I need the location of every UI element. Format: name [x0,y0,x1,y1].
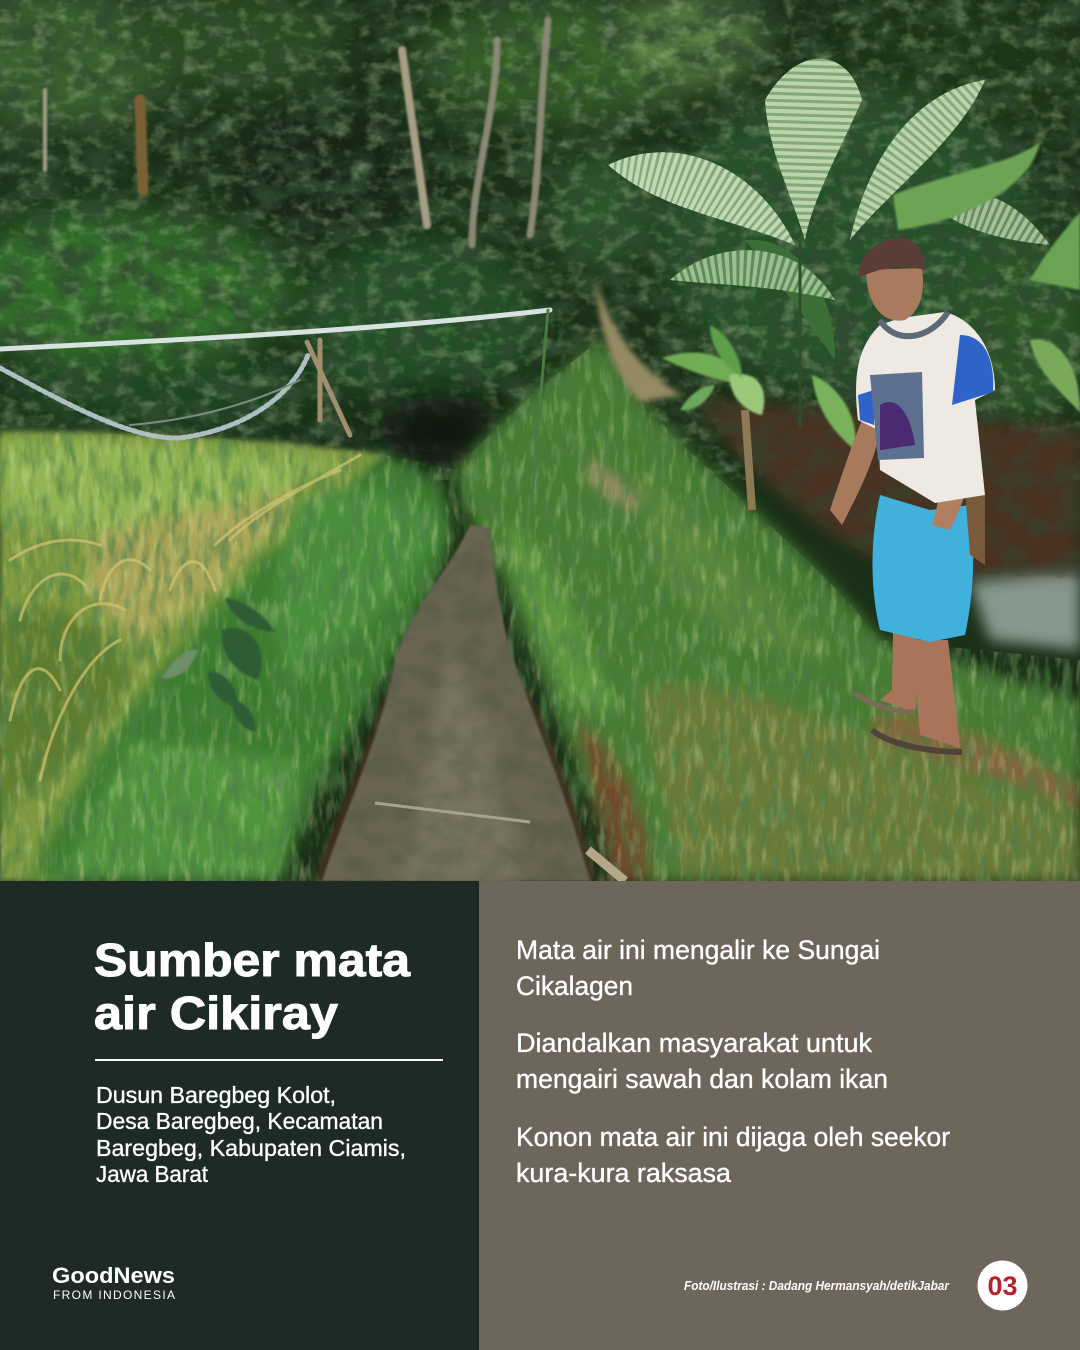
right grass bank and path [456,340,1080,881]
logo: GoodNews from Indonesia [52,1263,175,1302]
canal water [320,520,625,881]
title: air Cikiray [94,987,338,1039]
title [94,934,411,1039]
fact 3: Konon mata air ini dijaga oleh seekor [516,1122,950,1152]
shirt [856,312,995,503]
fact 2: mengairi sawah dan kolam ikan [516,1064,888,1094]
page number badge [978,1260,1028,1310]
legs [880,630,960,748]
location text: Desa Baregbeg, Kecamatan [96,1108,383,1134]
head [866,268,923,321]
fact 3: kura-kura raksasa [516,1158,732,1188]
palm and banana plants [590,40,1080,510]
fact 3 [516,1122,950,1188]
logo: GoodNews from Indonesia: FROM INDONESIA [53,1288,175,1302]
belt sash [965,490,985,565]
left grass bank [30,455,450,881]
man standing in cap, white shirt and blue shorts [830,238,995,752]
grass blade texture [0,335,1080,881]
foliage texture [0,0,1080,480]
fact 1: Mata air ini mengalir ke Sungai [516,935,880,965]
left rice field [0,432,385,881]
taro plant on the bank [162,598,275,732]
title: Sumber mata [94,934,410,986]
tree trunks [45,20,548,245]
arms [830,420,880,525]
logo: GoodNews from Indonesia: GoodNews [52,1263,175,1288]
dark hollow over the canal [378,394,502,466]
location text: Dusun Baregbeg Kolot, [96,1082,336,1108]
fact 2 [516,1028,888,1094]
forest background [0,0,1080,881]
fact 2: Diandalkan masyarakat untuk [516,1028,872,1058]
rice stalks [10,455,360,780]
footpath receding into the trees [596,285,682,402]
photo: irrigation canal, rice field and man standing on a path [0,0,1080,881]
shorts [872,495,973,642]
divider line [95,1059,443,1061]
rope fence across the canal [0,310,550,520]
location text [96,1082,406,1187]
panel: facts (taupe) [479,881,1080,1350]
soil and stream on the right [690,395,1080,650]
location text: Jawa Barat [96,1161,209,1187]
page number badge: 03 [987,1271,1018,1301]
fact 1 [516,935,880,1001]
fact 1: Cikalagen [516,971,633,1001]
panel: location (dark green) [0,881,479,1350]
location text: Baregbeg, Kabupaten Ciamis, [96,1135,406,1161]
